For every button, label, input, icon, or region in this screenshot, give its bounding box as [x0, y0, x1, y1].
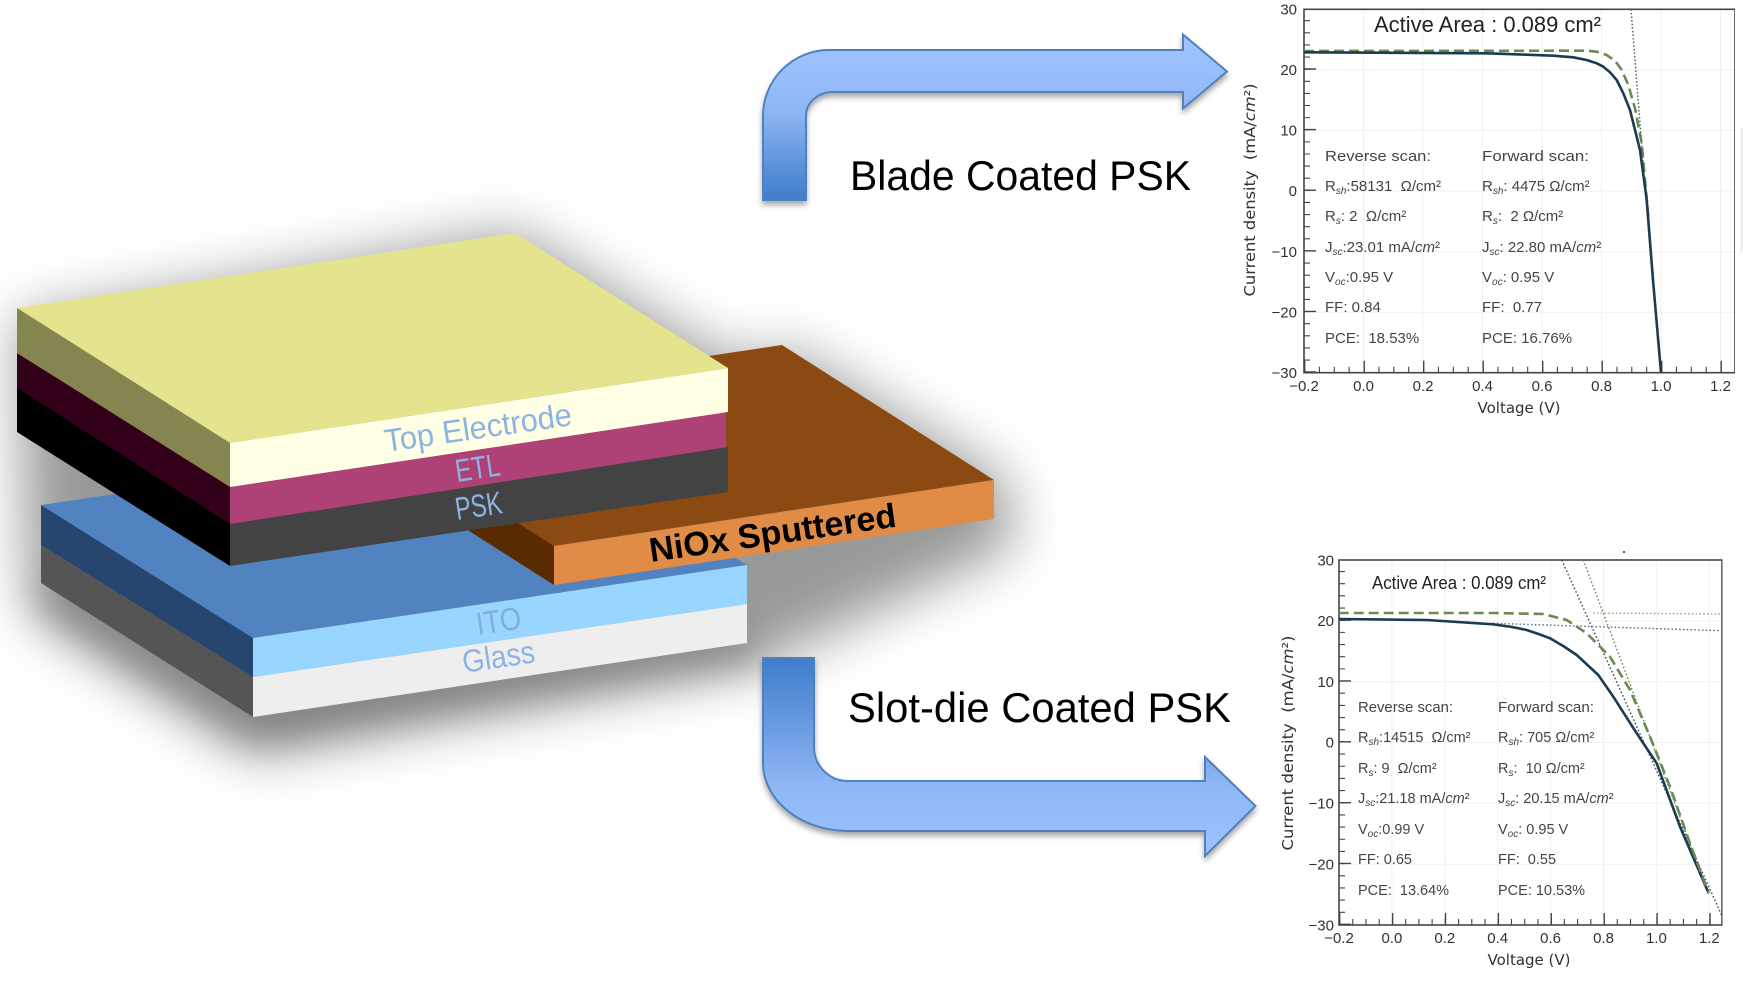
- axes frame and ticks: [1339, 560, 1722, 925]
- grid: [1304, 9, 1735, 373]
- reverse scan values: Reverse scan:: [1358, 700, 1453, 716]
- y tick labels: −30: [1309, 918, 1334, 934]
- reverse scan values: [1325, 148, 1441, 347]
- x tick labels: −0.2: [1324, 930, 1354, 947]
- forward scan values: sc: [1490, 247, 1500, 258]
- forward scan values: : 10 Ω/cm²: [1513, 761, 1585, 777]
- forward scan values: : 705 Ω/cm²: [1519, 730, 1595, 746]
- x axis label: Voltage (V): [1488, 951, 1570, 969]
- forward scan values: oc: [1508, 829, 1518, 840]
- reverse scan values: :0.99 V: [1378, 822, 1425, 838]
- y tick labels: −10: [1272, 244, 1297, 261]
- forward scan values: sc: [1505, 798, 1515, 809]
- reverse scan values: : 9 Ω/cm²: [1373, 761, 1437, 777]
- reverse scan values: Reverse scan:: [1325, 148, 1431, 165]
- reverse scan values: R: [1358, 761, 1368, 777]
- forward scan values: V: [1498, 822, 1508, 838]
- x tick labels: 0.8: [1591, 378, 1612, 395]
- reverse scan values: sc: [1365, 798, 1375, 809]
- y tick labels: −30: [1272, 365, 1297, 382]
- reverse scan values: FF: 0.84: [1325, 299, 1381, 316]
- reverse scan values: :21.18 mA/: [1375, 791, 1446, 807]
- forward scan values: : 0.95 V: [1518, 822, 1569, 838]
- reverse scan values: :23.01 mA/: [1342, 239, 1416, 256]
- reverse scan values: cm²: [1445, 791, 1470, 807]
- forward scan values: Forward scan:: [1482, 148, 1589, 165]
- reverse scan values: s: [1368, 768, 1373, 779]
- x tick labels: 1.2: [1710, 378, 1731, 395]
- y tick labels: −20: [1309, 856, 1334, 874]
- y tick labels: 20: [1280, 62, 1297, 79]
- curve: reverse scan: [1304, 52, 1661, 373]
- reverse scan values: FF: 0.65: [1358, 852, 1412, 868]
- reverse scan values: J: [1325, 239, 1332, 256]
- forward scan values: cm²: [1589, 791, 1614, 807]
- arrow: to blade coated chart: [763, 34, 1227, 200]
- curve: forward scan: [1339, 613, 1709, 893]
- reverse scan values: oc: [1335, 277, 1346, 288]
- reverse scan values: sh: [1336, 186, 1347, 197]
- forward scan values: : 2 Ω/cm²: [1498, 208, 1563, 225]
- label: Top Electrode: Top Electrode: [382, 396, 574, 459]
- cast shadow of device stack: [17, 232, 1015, 755]
- curve: forward scan: [1304, 51, 1648, 217]
- grid: [1339, 560, 1722, 925]
- layer: ITO: [41, 432, 747, 677]
- dotted fit lines: [1493, 560, 1722, 917]
- y tick labels: 20: [1317, 613, 1334, 630]
- label: PSK: PSK: [453, 484, 505, 527]
- reverse scan values: oc: [1368, 829, 1378, 840]
- y tick labels: 0: [1289, 183, 1297, 200]
- x tick labels: 0.8: [1593, 930, 1614, 947]
- y tick labels: 30: [1317, 552, 1334, 570]
- forward scan values: R: [1498, 730, 1508, 746]
- forward scan values: PCE: 10.53%: [1498, 883, 1585, 899]
- reverse scan values: :0.95 V: [1346, 269, 1393, 286]
- label: ETL: ETL: [453, 447, 503, 489]
- y axis label: Current density (mA/cm²): [1279, 635, 1297, 851]
- x axis label: Voltage (V): [1478, 399, 1560, 417]
- x tick labels: 0.4: [1487, 930, 1508, 947]
- reverse scan values: :58131 Ω/cm²: [1346, 178, 1441, 195]
- y tick labels: 30: [1280, 2, 1297, 18]
- forward scan values: sh: [1493, 186, 1504, 197]
- forward scan values: FF: 0.55: [1498, 852, 1556, 868]
- reverse scan values: R: [1358, 730, 1368, 746]
- layer: NiOx sputtered: [342, 345, 994, 585]
- y tick labels: 0: [1326, 734, 1334, 752]
- x tick labels: [1289, 378, 1731, 395]
- y tick labels: −20: [1272, 304, 1297, 322]
- forward scan values: : 22.80 mA/: [1500, 239, 1577, 256]
- chart: slot-die coated J-V curve: [1279, 552, 1722, 969]
- reverse scan values: V: [1325, 269, 1335, 286]
- x tick labels: 0.6: [1532, 378, 1552, 395]
- label: NiOx Sputtered: NiOx Sputtered: [647, 497, 899, 570]
- reverse scan values: : 2 Ω/cm²: [1341, 208, 1406, 225]
- forward scan values: FF: 0.77: [1482, 299, 1542, 316]
- x tick labels: −0.2: [1289, 378, 1319, 395]
- curve: reverse scan: [1339, 619, 1709, 893]
- reverse scan values: R: [1325, 178, 1336, 195]
- forward scan values: sh: [1508, 737, 1519, 748]
- x tick labels: 1.2: [1699, 930, 1720, 947]
- forward scan values: J: [1482, 239, 1490, 256]
- axes frame and ticks: [1304, 9, 1735, 373]
- y tick labels: [1272, 2, 1297, 382]
- label: Glass: Glass: [460, 633, 537, 680]
- x tick labels: 0.0: [1381, 930, 1402, 947]
- forward scan values: [1482, 148, 1601, 347]
- active area note: Active Area : 0.089 cm²: [1374, 12, 1601, 37]
- reverse scan values: [1358, 700, 1471, 899]
- forward scan values: R: [1482, 178, 1493, 195]
- layer: ETL: [17, 353, 726, 528]
- reverse scan values: sc: [1332, 247, 1342, 258]
- label: ITO: ITO: [474, 600, 524, 642]
- heading: Blade Coated PSK: Blade Coated PSK: [850, 152, 1191, 199]
- reverse scan values: sh: [1368, 737, 1379, 748]
- forward scan values: R: [1482, 208, 1493, 225]
- reverse scan values: PCE: 18.53%: [1325, 330, 1419, 347]
- reverse scan values: cm²: [1415, 239, 1440, 256]
- y tick labels: 10: [1317, 674, 1334, 691]
- forward scan values: PCE: 16.76%: [1482, 330, 1572, 347]
- x tick labels: 0.0: [1353, 378, 1374, 395]
- y tick labels: 10: [1280, 122, 1297, 140]
- reverse scan values: J: [1358, 791, 1365, 807]
- forward scan values: : 20.15 mA/: [1515, 791, 1590, 807]
- arrow: to slot-die chart: [763, 658, 1256, 856]
- forward scan values: oc: [1492, 277, 1503, 288]
- x tick labels: 1.0: [1651, 378, 1671, 395]
- layer: PSK: [17, 388, 728, 566]
- reverse scan values: R: [1325, 208, 1336, 225]
- forward scan values: R: [1498, 761, 1508, 777]
- active area note: Active Area : 0.089 cm²: [1372, 572, 1546, 593]
- x tick labels: 0.6: [1540, 930, 1561, 947]
- x tick labels: 0.2: [1434, 930, 1455, 947]
- forward scan values: cm²: [1576, 239, 1601, 256]
- heading: Slot-die Coated PSK: Slot-die Coated PSK: [848, 684, 1231, 731]
- forward scan values: Forward scan:: [1498, 700, 1594, 716]
- forward scan values: J: [1498, 791, 1505, 807]
- forward scan values: [1498, 700, 1614, 899]
- y tick labels: −10: [1309, 796, 1334, 812]
- x tick labels: [1324, 930, 1720, 947]
- reverse scan values: s: [1336, 216, 1341, 227]
- x tick labels: 0.4: [1472, 378, 1493, 395]
- x tick labels: 0.2: [1413, 378, 1433, 395]
- forward scan values: s: [1508, 768, 1513, 779]
- forward scan values: : 0.95 V: [1503, 269, 1554, 286]
- forward scan values: s: [1493, 216, 1498, 227]
- layer: top electrode: [17, 233, 728, 487]
- y axis label: Current density (mA/cm²): [1241, 83, 1259, 297]
- curve: dotted fit: [1631, 9, 1653, 287]
- x tick labels: 1.0: [1646, 930, 1667, 947]
- chart: blade coated J-V curve: [1241, 2, 1735, 417]
- reverse scan values: PCE: 13.64%: [1358, 883, 1449, 899]
- forward scan values: V: [1482, 269, 1492, 286]
- layer: glass: [41, 545, 747, 717]
- reverse scan values: :14515 Ω/cm²: [1379, 730, 1471, 746]
- forward scan values: : 4475 Ω/cm²: [1503, 178, 1590, 195]
- y tick labels: [1309, 552, 1334, 934]
- reverse scan values: V: [1358, 822, 1368, 838]
